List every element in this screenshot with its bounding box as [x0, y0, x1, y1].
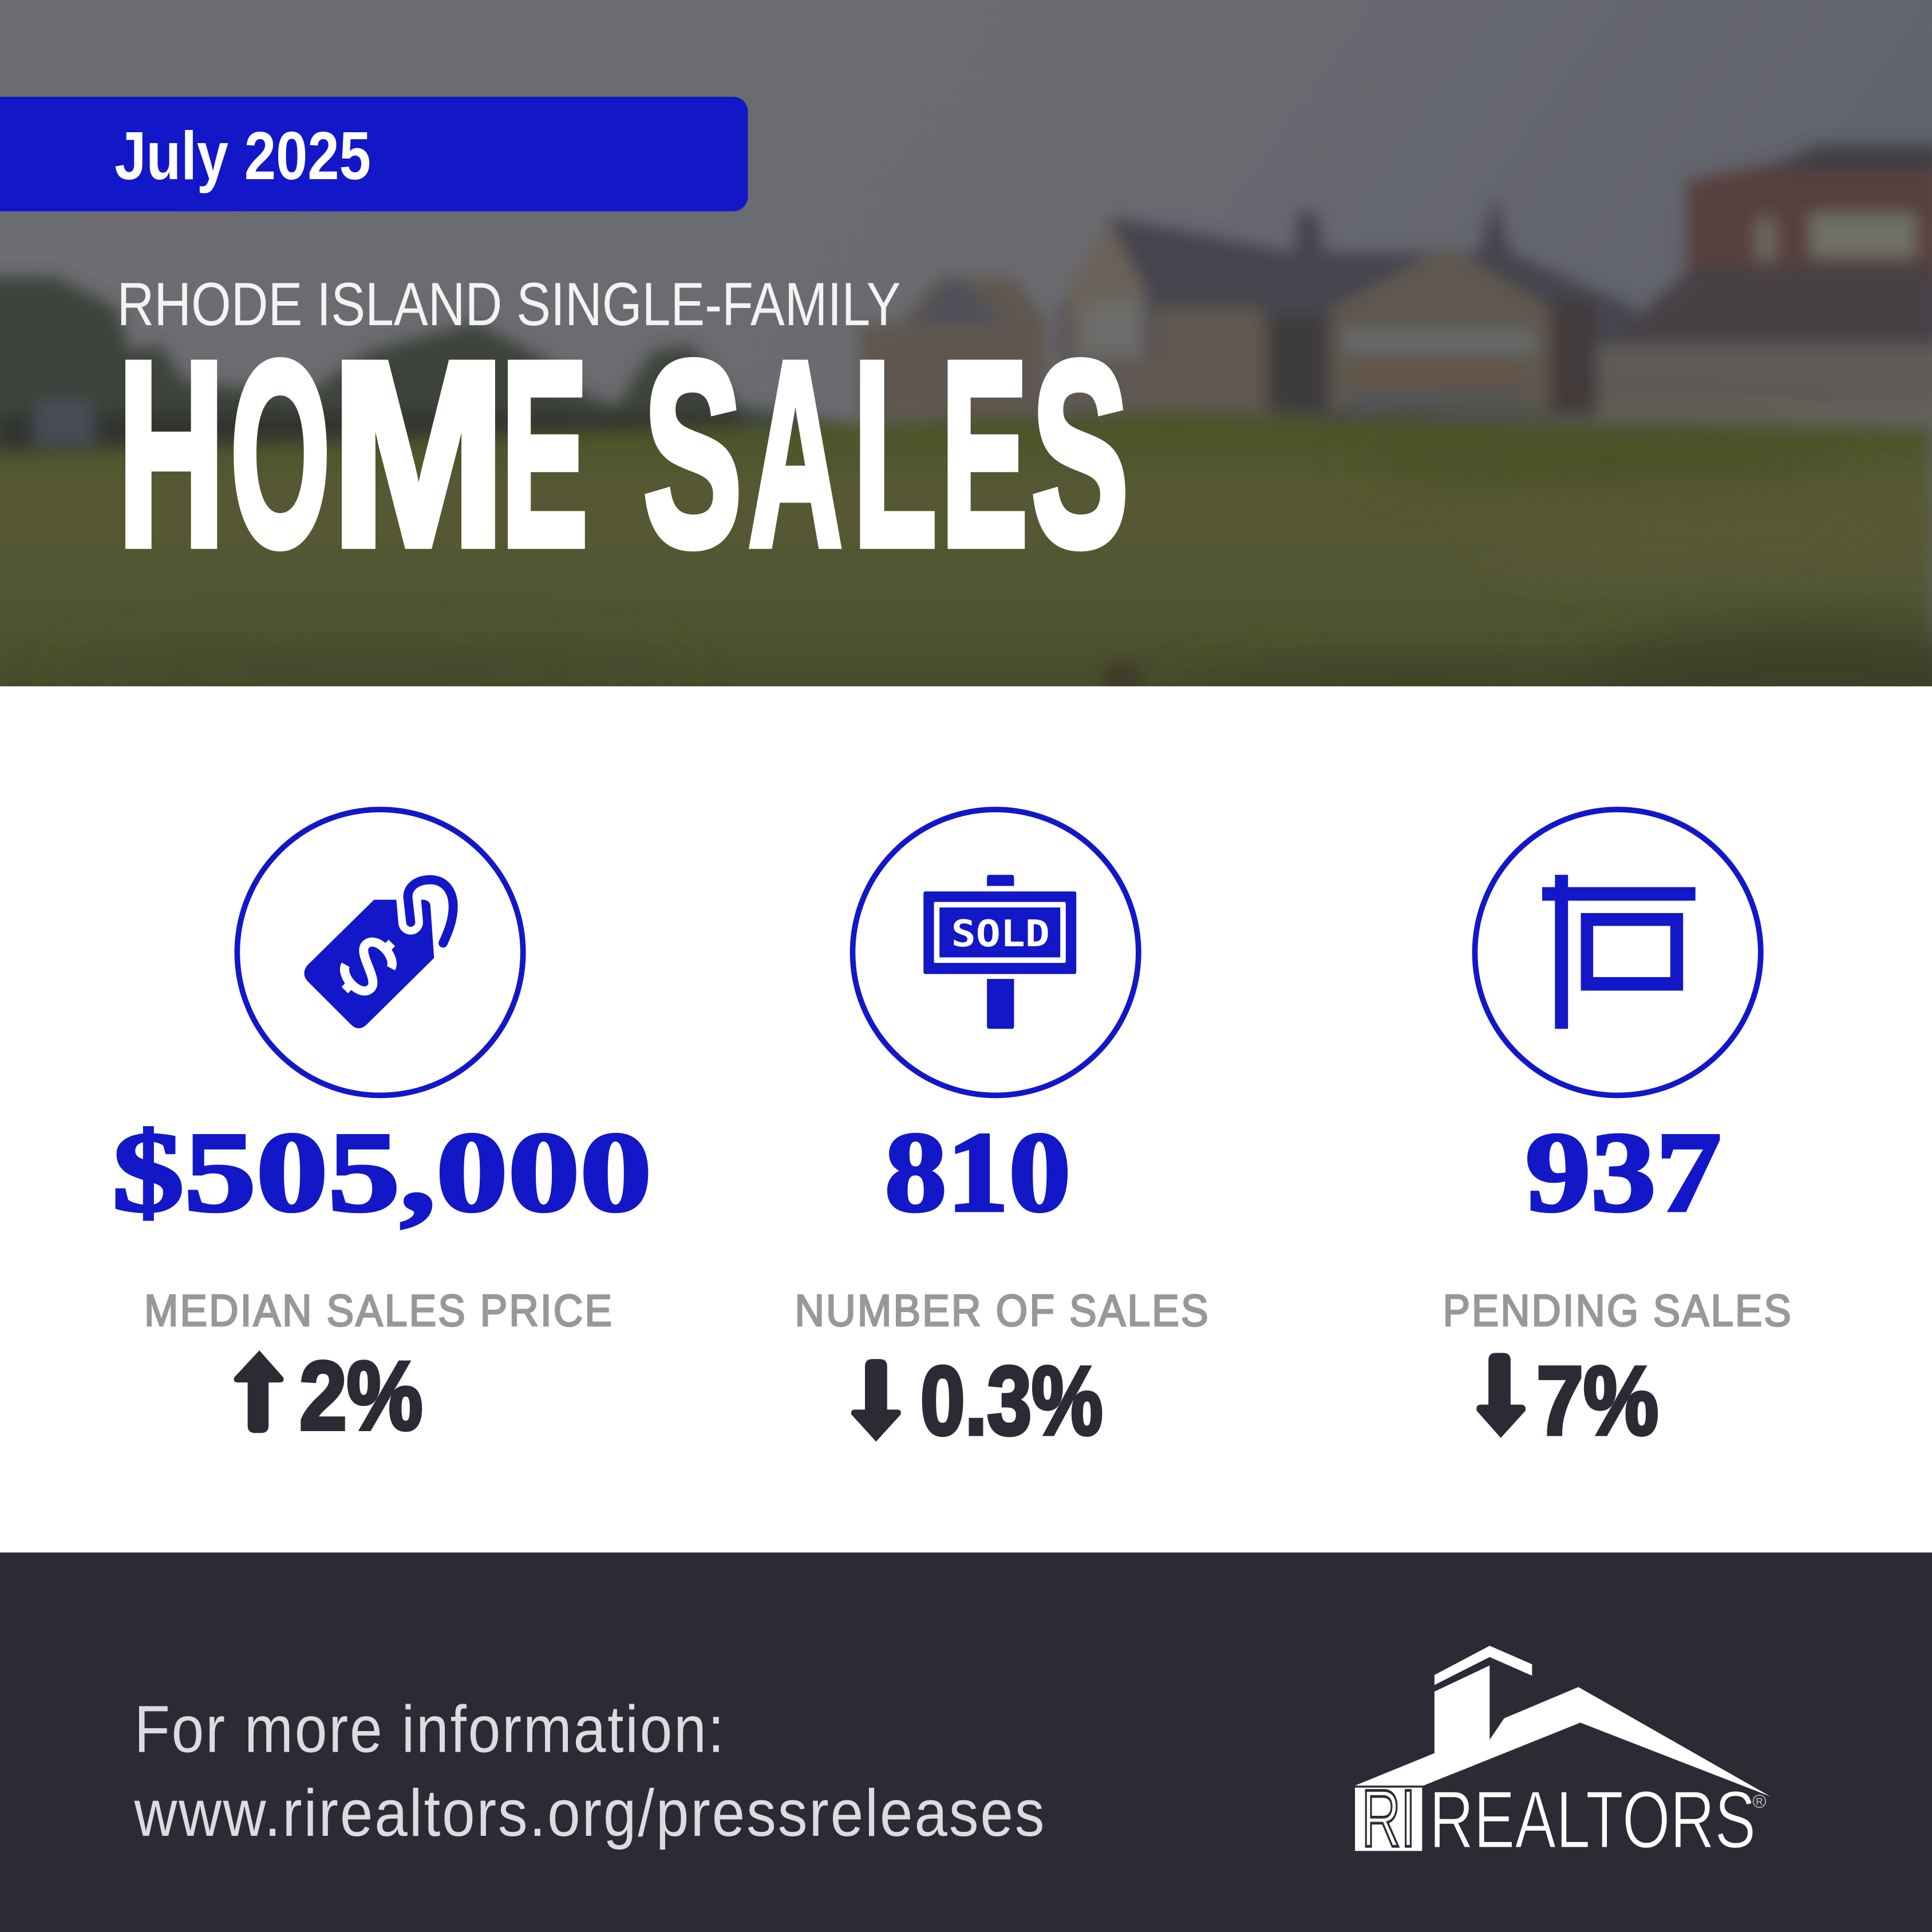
brick building — [1687, 154, 1932, 296]
low white building — [1602, 266, 1932, 347]
change: 0.3% — [920, 1346, 1103, 1455]
logo: RI Realtors — [1355, 1646, 1771, 1866]
icon: price tag — [237, 809, 523, 1096]
panel: pending sales — [1443, 809, 1793, 1455]
contact text: www.rirealtors.org/pressreleases — [134, 1776, 1046, 1850]
main roofs — [1060, 195, 1636, 419]
lawn — [0, 410, 1932, 702]
title: L — [853, 307, 937, 600]
icon: hanging sign — [1475, 809, 1761, 1096]
logo: RI Realtors: RI — [1361, 1773, 1416, 1864]
title: O — [231, 307, 330, 600]
value: $505,000 — [112, 1109, 652, 1236]
change: 2% — [299, 1342, 422, 1451]
contact text: For more information: — [135, 1692, 726, 1767]
contact text — [134, 1692, 1046, 1850]
title: H — [118, 307, 224, 600]
date text: July 2025 — [114, 118, 371, 194]
title: E — [501, 307, 588, 600]
panel: number of sales — [795, 809, 1210, 1455]
value: 810 — [884, 1109, 1070, 1236]
value: 937 — [1526, 1109, 1721, 1236]
arrow down — [1476, 1353, 1526, 1438]
change: 7% — [1536, 1346, 1658, 1455]
title: M — [331, 307, 505, 600]
panel: footer — [0, 1552, 1932, 1932]
trees on the left — [0, 268, 839, 459]
title: E — [941, 307, 1028, 600]
logo: RI Realtors: REALTORS — [1429, 1775, 1756, 1866]
arrow up — [234, 1350, 283, 1433]
title: S — [643, 307, 742, 600]
arrow down — [851, 1359, 901, 1441]
panel: median sales price — [112, 809, 652, 1451]
icon: sold sign — [852, 809, 1139, 1096]
title: A — [749, 307, 842, 600]
title — [118, 307, 1129, 600]
panel: blurred house photo header — [0, 0, 1932, 752]
logo: RI Realtors: R — [1756, 1796, 1763, 1807]
label: MEDIAN SALES PRICE — [144, 1286, 614, 1336]
gables and walls — [1067, 222, 1146, 357]
title: S — [1032, 307, 1129, 600]
lawn shading — [49, 438, 1932, 752]
date banner — [0, 97, 748, 211]
label: NUMBER OF SALES — [795, 1286, 1210, 1336]
label: PENDING SALES — [1443, 1286, 1793, 1336]
left wing — [859, 278, 1048, 419]
icon: sold sign: SOLD — [951, 912, 1050, 955]
subtitle: RHODE ISLAND SINGLE-FAMILY — [117, 270, 900, 338]
